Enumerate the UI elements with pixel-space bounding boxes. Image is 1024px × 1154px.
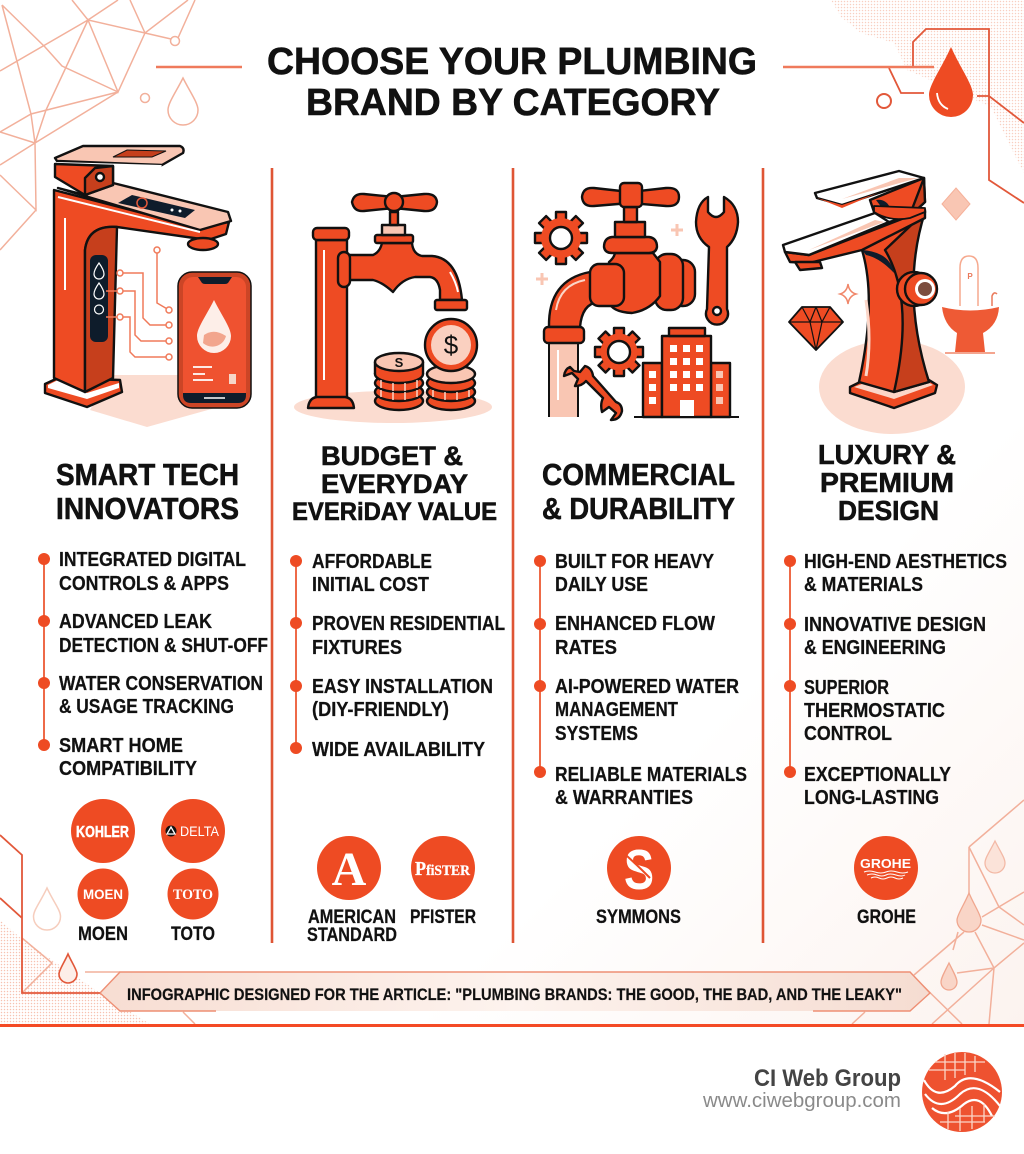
list: budget features: AFFORDABLE — [312, 551, 432, 573]
list: luxury features — [784, 551, 1007, 809]
logos: Kohler, Delta, Moen, Toto: TOTO — [171, 924, 215, 945]
list: commercial features: AI-POWERED WATER — [555, 676, 739, 698]
list: luxury features: SUPERIOR — [804, 677, 889, 699]
list: commercial features: DAILY USE — [555, 574, 648, 596]
list: smart tech features: ADVANCED LEAK — [59, 611, 212, 633]
heading: smart tech innovators — [56, 457, 239, 526]
list: smart tech features: SMART HOME — [59, 735, 183, 757]
logos: Kohler, Delta, Moen, Toto: MOEN — [83, 886, 123, 902]
list: commercial features: SYSTEMS — [555, 723, 638, 745]
list: budget features: FIXTURES — [312, 637, 402, 659]
banner: article credit: INFOGRAPHIC DESIGNED FOR THE ARTICLE: "PLUMBING BRANDS: THE GOOD, THE BAD, AND THE LEAKY" — [127, 985, 902, 1004]
logo: CI Web Group emblem — [922, 1052, 1002, 1132]
list: luxury features: INNOVATIVE DESIGN — [804, 614, 986, 636]
icon: budget tap and coins — [294, 193, 492, 423]
decoration: bottom-right network and drops — [852, 800, 1024, 1024]
heading: commercial and durability: COMMERCIAL — [542, 457, 735, 492]
decoration: bottom-left circuit lines and drops — [0, 835, 195, 1024]
title: CHOOSE YOUR PLUMBING — [267, 41, 757, 83]
list: smart tech features: COMPATIBILITY — [59, 758, 198, 780]
logos: Kohler, Delta, Moen, Toto: TOTO — [173, 887, 213, 903]
panel: commercial and durability — [534, 183, 747, 928]
list: budget features: PROVEN RESIDENTIAL — [312, 613, 505, 635]
heading: commercial and durability — [542, 457, 735, 526]
list: luxury features: & MATERIALS — [804, 574, 923, 596]
list: smart tech features — [38, 549, 268, 780]
list: commercial features: ENHANCED FLOW — [555, 613, 715, 635]
list: smart tech features: INTEGRATED DIGITAL — [59, 549, 246, 571]
heading: luxury and premium design: PREMIUM — [820, 467, 954, 498]
logo: Grohe — [854, 836, 918, 928]
footer: CI Web Group wordmark: www.ciwebgroup.com — [702, 1090, 901, 1112]
logos: American Standard, Pfister: PFISTER — [410, 907, 476, 928]
decoration: top-right circuit lines and water drop — [877, 29, 1024, 203]
logos: Kohler, Delta, Moen, Toto: MOEN — [78, 924, 128, 945]
list: commercial features: BUILT FOR HEAVY — [555, 551, 715, 573]
list: budget features: WIDE AVAILABILITY — [312, 739, 486, 761]
list: commercial features — [534, 551, 747, 809]
heading: luxury and premium design — [818, 439, 956, 526]
list: commercial features: RELIABLE MATERIALS — [555, 764, 747, 786]
list: smart tech features: & USAGE TRACKING — [59, 696, 234, 718]
list: luxury features: CONTROL — [804, 723, 892, 745]
list: smart tech features: WATER CONSERVATION — [59, 673, 263, 695]
list: commercial features: RATES — [555, 637, 617, 659]
logo: Symmons — [596, 836, 681, 928]
heading: budget and everyday value: EVERiDAY VALUE — [292, 498, 497, 526]
panel: budget and everyday value — [290, 193, 505, 946]
logo: Grohe: GROHE — [857, 907, 916, 928]
list: budget features: EASY INSTALLATION — [312, 676, 493, 698]
title — [156, 41, 934, 124]
icon: budget tap and coins: $ — [444, 330, 459, 360]
list: luxury features: LONG-LASTING — [804, 787, 939, 809]
heading: smart tech innovators: INNOVATORS — [56, 491, 239, 526]
list: commercial features: MANAGEMENT — [555, 699, 678, 721]
heading: budget and everyday value — [292, 441, 497, 526]
heading: commercial and durability: & DURABILITY — [542, 491, 735, 526]
logos: American Standard, Pfister: PfiSTER — [415, 858, 470, 880]
heading: luxury and premium design: DESIGN — [838, 495, 939, 526]
list: budget features — [290, 551, 505, 761]
list: budget features: (DIY-FRIENDLY) — [312, 699, 449, 721]
list: commercial features: & WARRANTIES — [555, 787, 693, 809]
decoration: top-left geometric network — [0, 0, 198, 250]
list: luxury features: EXCEPTIONALLY — [804, 764, 952, 786]
list: luxury features: THERMOSTATIC — [804, 700, 945, 722]
logo: Symmons: SYMMONS — [596, 907, 681, 928]
logos: Kohler, Delta, Moen, Toto: KOHLER — [76, 824, 129, 841]
logos: American Standard, Pfister: STANDARD — [307, 925, 397, 946]
icon: commercial valve, gears, wrenches, building — [535, 183, 739, 420]
panel: luxury and premium design — [783, 171, 1007, 928]
logo: Symmons: S — [624, 838, 654, 902]
logo: Grohe: GROHE — [860, 856, 911, 871]
banner: article credit — [100, 972, 930, 1011]
logos: American Standard, Pfister: AMERICAN — [308, 907, 396, 928]
icon: luxury faucet, diamond, basin — [783, 171, 999, 434]
heading: budget and everyday value: EVERYDAY — [321, 469, 468, 499]
logos: American Standard, Pfister: A — [332, 843, 367, 896]
panel: smart tech innovators — [38, 146, 268, 945]
logos: Kohler, Delta, Moen, Toto — [71, 799, 225, 945]
list: smart tech features: CONTROLS & APPS — [59, 573, 229, 595]
icon: luxury faucet, diamond, basin: P — [967, 272, 973, 281]
heading: smart tech innovators: SMART TECH — [56, 457, 239, 492]
heading: budget and everyday value: BUDGET & — [321, 441, 463, 471]
icon: budget tap and coins: S — [395, 355, 404, 370]
list: luxury features: & ENGINEERING — [804, 637, 946, 659]
list: budget features: INITIAL COST — [312, 574, 429, 596]
footer: CI Web Group wordmark: CI Web Group — [754, 1065, 901, 1092]
heading: luxury and premium design: LUXURY & — [818, 439, 956, 470]
logos: Kohler, Delta, Moen, Toto: DELTA — [180, 823, 220, 839]
list: smart tech features: DETECTION & SHUT-OFF — [59, 635, 268, 657]
icon: smart faucet and phone — [45, 146, 251, 427]
footer: CI Web Group wordmark — [702, 1065, 901, 1112]
logos: American Standard, Pfister — [307, 836, 476, 946]
title: BRAND BY CATEGORY — [306, 82, 720, 124]
